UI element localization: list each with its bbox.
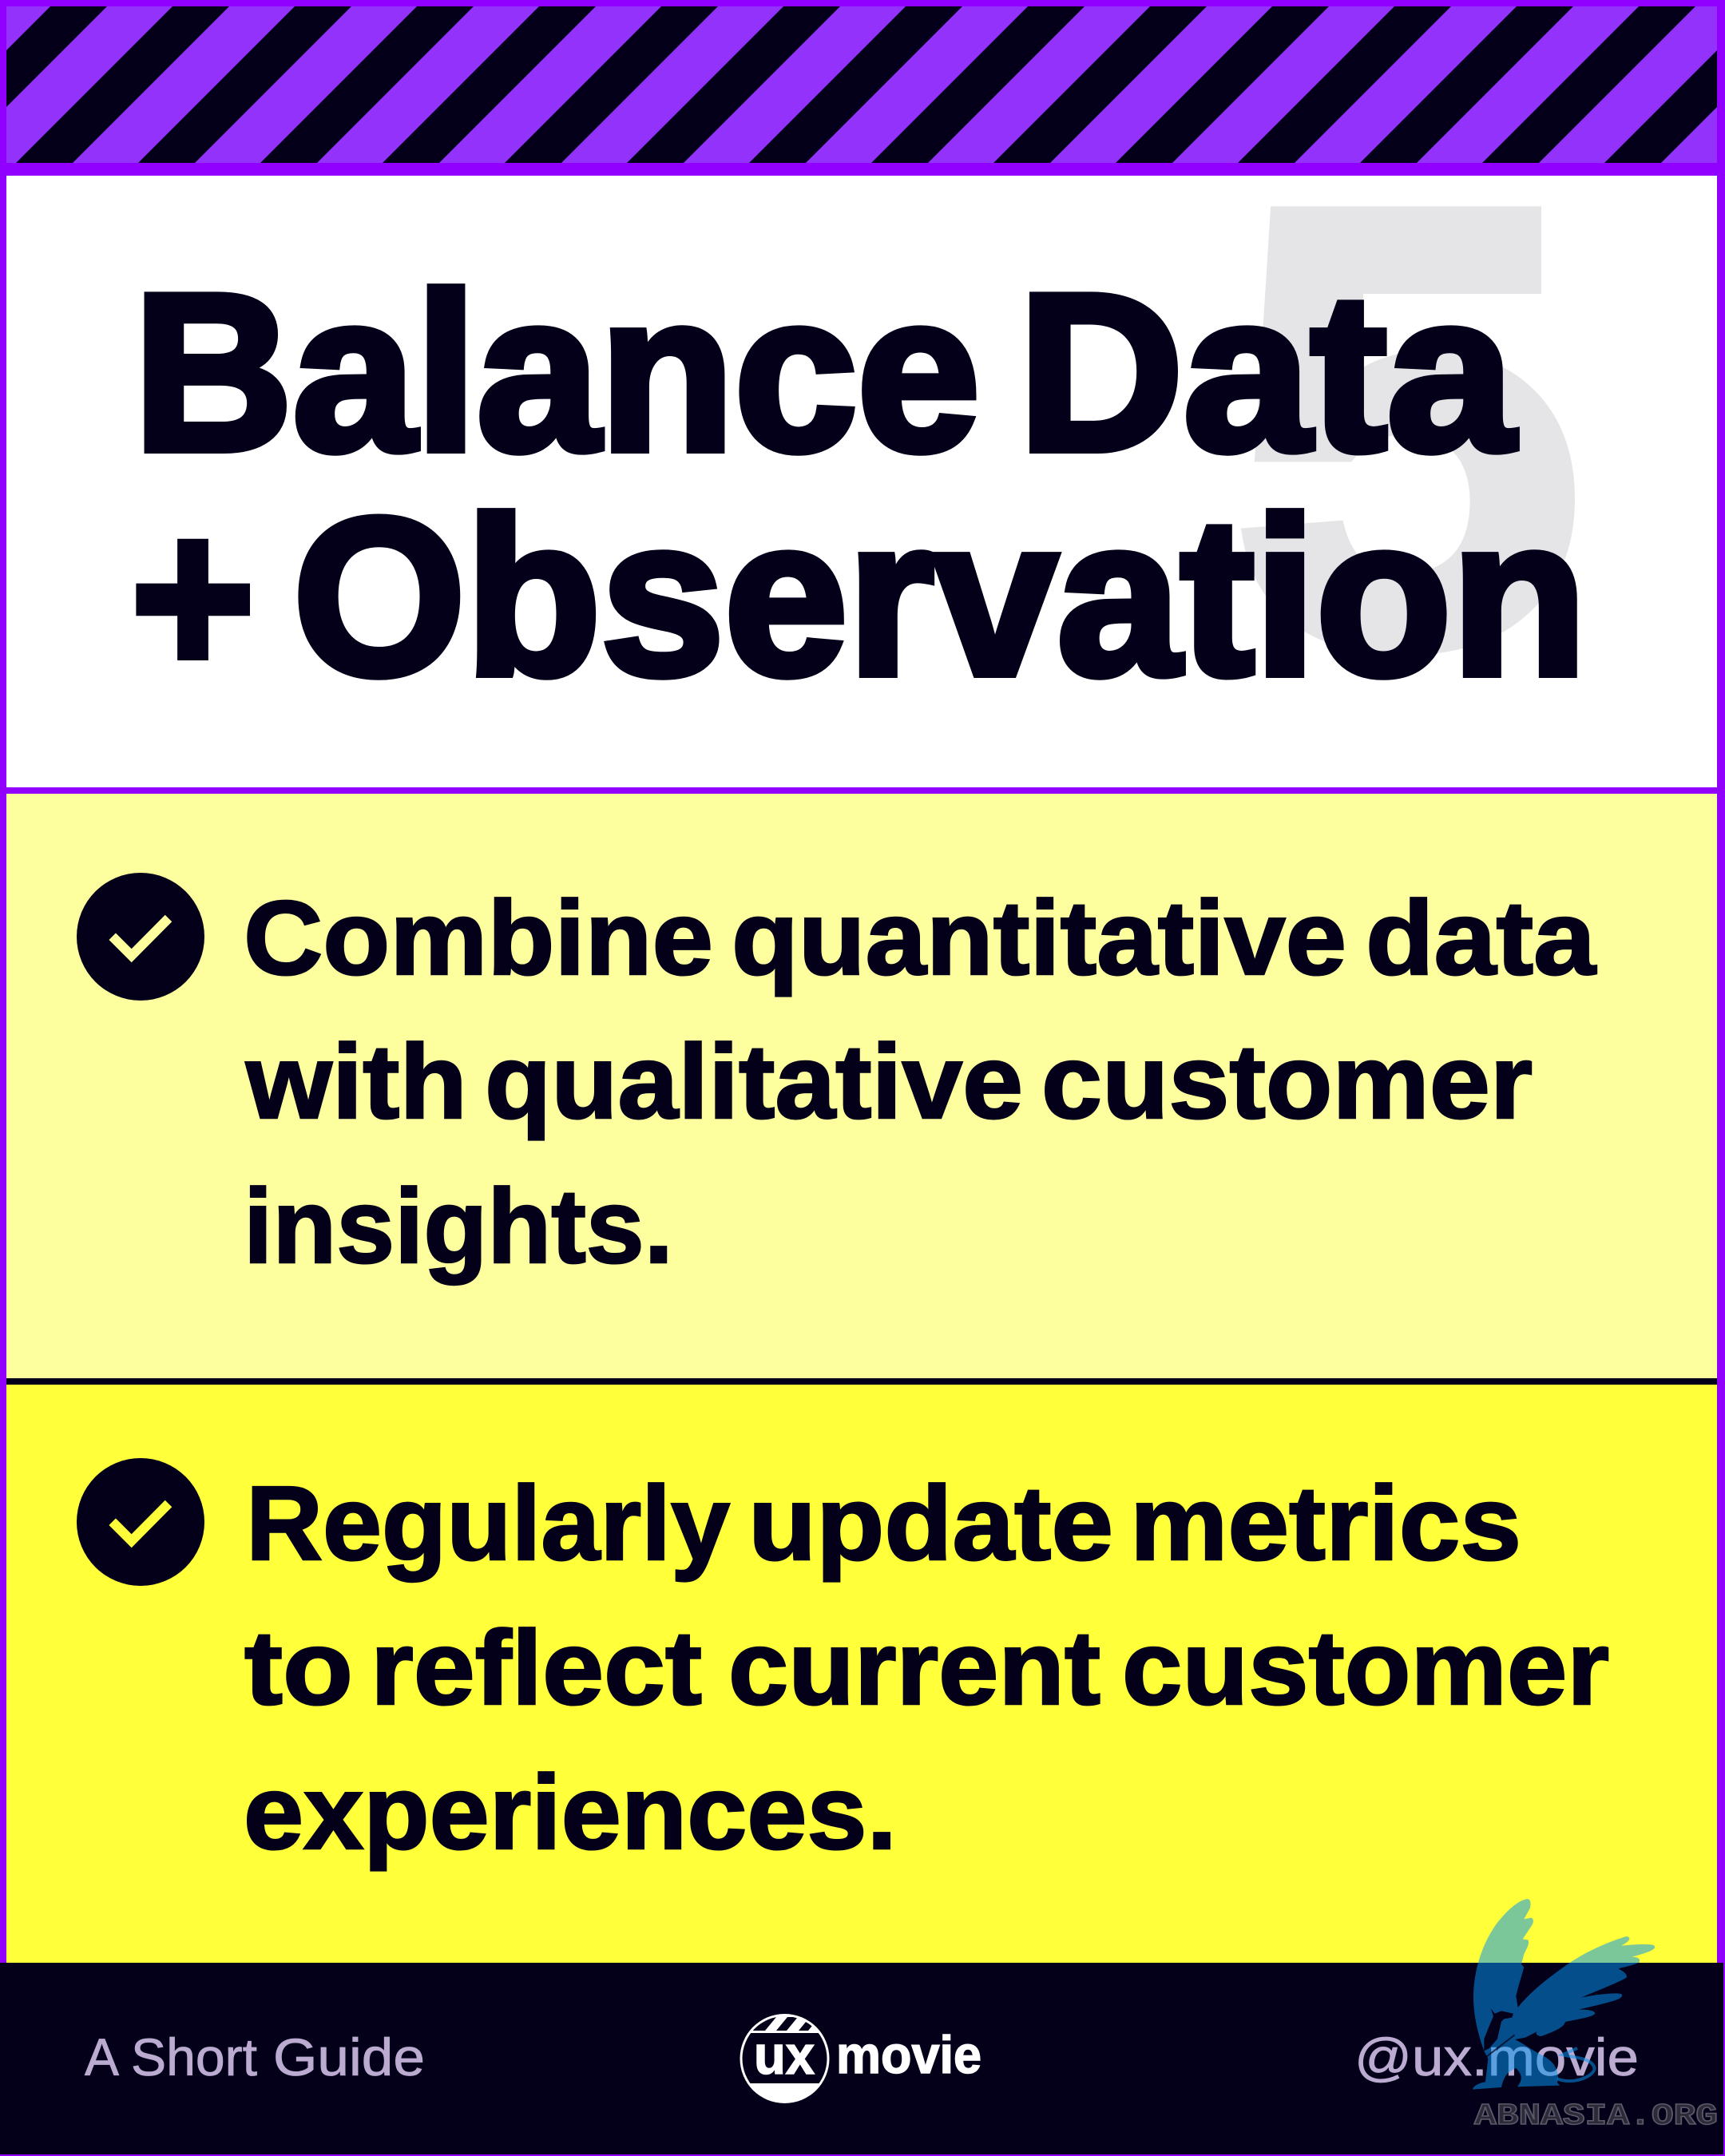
footer label left: Guide	[273, 2027, 425, 2087]
icon: check circle 2	[77, 1458, 204, 1586]
tip text 1: data	[1366, 879, 1597, 997]
panel: first tip	[6, 794, 1717, 1378]
tip text 1: Combine	[244, 879, 713, 997]
title text: Data	[1018, 248, 1516, 497]
panel: title	[6, 79, 1717, 787]
icon: check circle 1	[77, 873, 204, 1001]
footer label left: A	[85, 2027, 119, 2087]
tip text 2: to	[244, 1609, 353, 1726]
tip text 2: current	[728, 1609, 1100, 1726]
logo: ux movie: movie	[836, 2025, 981, 2084]
tip text 1: qualitative	[485, 1023, 1023, 1140]
tip text 1: customer	[1041, 1023, 1533, 1140]
footer label left: Short	[131, 2027, 257, 2087]
tip text 2	[244, 1464, 1609, 1871]
footer bar	[0, 1963, 1723, 2154]
logo: ux movie	[735, 2014, 981, 2103]
title text	[131, 248, 1587, 722]
title text: Observation	[293, 473, 1587, 722]
tip text 2: Regularly	[246, 1464, 730, 1582]
tip text 2: metrics	[1130, 1464, 1521, 1582]
footer handle right: @ux.movie	[1354, 2027, 1639, 2087]
panel divider black	[6, 1378, 1717, 1385]
panel: second tip	[6, 1385, 1717, 1963]
watermark text: ABNASIA.ORG	[1474, 2099, 1718, 2134]
tip text 1: insights.	[244, 1167, 673, 1285]
tip text 2: update	[748, 1464, 1113, 1582]
tip text 1	[244, 879, 1597, 1285]
panel divider purple	[6, 787, 1717, 794]
striped header band	[6, 6, 1717, 163]
tip text 2: customer	[1122, 1609, 1609, 1726]
title text: Balance	[133, 248, 980, 497]
logo: ux movie: ux	[754, 2025, 815, 2086]
tip text 1: quantitative	[732, 879, 1346, 997]
tip text 1: with	[245, 1023, 467, 1140]
large background number 5: 5	[1230, 79, 1585, 775]
tip text 2: experiences.	[244, 1754, 897, 1871]
tip text 2: reflect	[371, 1609, 702, 1726]
footer label left	[85, 2027, 425, 2087]
title text: +	[131, 473, 255, 722]
watermark griffin	[1473, 1899, 1655, 2090]
